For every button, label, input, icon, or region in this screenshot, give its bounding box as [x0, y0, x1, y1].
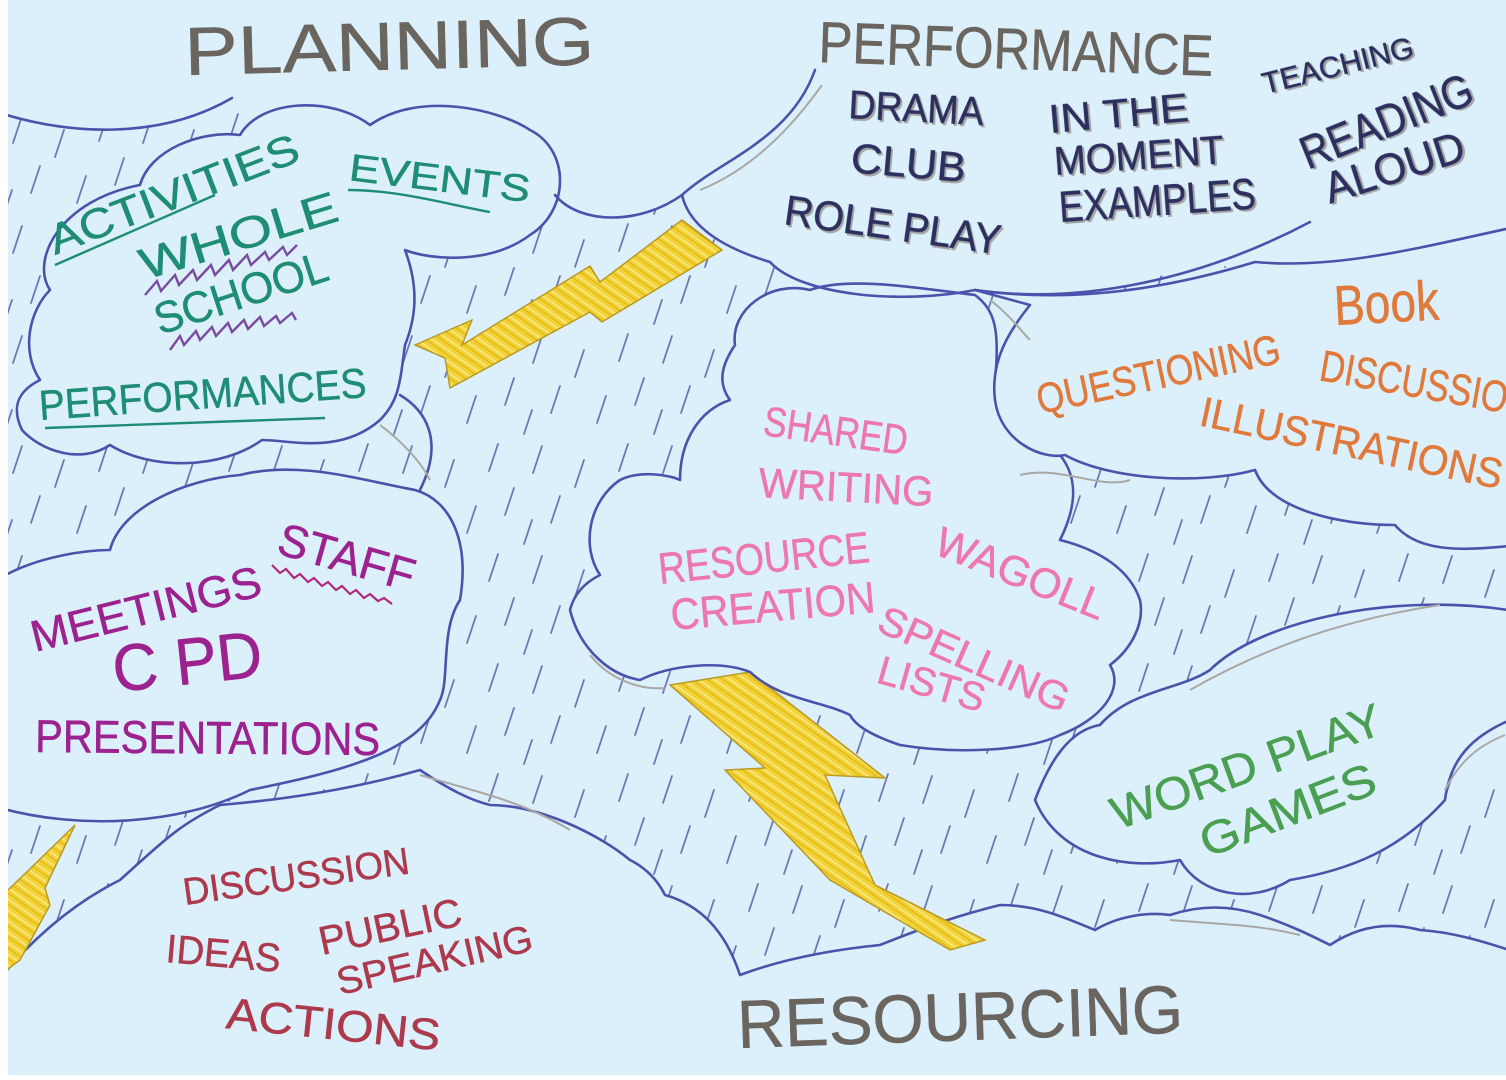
text: aloud: ALOUD: [1318, 122, 1471, 214]
heading: planning: PLANNING: [183, 3, 595, 90]
text: public: PUBLIC: [315, 891, 466, 964]
text: word play: WORD PLAY: [1104, 693, 1389, 839]
text: teaching: TEACHING: [1259, 31, 1417, 101]
text: examples: EXAMPLES: [1057, 169, 1257, 232]
lightning bolt: resourcing: [670, 672, 985, 950]
text: whole: WHOLE: [134, 183, 344, 290]
lightning bolt: planning to performance: [415, 220, 722, 388]
text: activities: ACTIVITIES: [41, 125, 306, 263]
underlines: [45, 190, 490, 428]
text: meetings: MEETINGS: [26, 557, 266, 662]
panel: word play cloud: [1035, 605, 1506, 894]
text: staff: STAFF: [272, 513, 421, 601]
panel: performance cloud outline: [400, 70, 1310, 490]
text: writing: WRITING: [758, 459, 935, 515]
heading: resourcing: RESOURCING: [736, 971, 1184, 1063]
text: ideas: IDEAS: [164, 927, 283, 981]
text: role play: ROLE PLAY: [782, 186, 1004, 263]
text: presentations: PRESENTATIONS: [35, 710, 380, 765]
text: reading: READING: [1292, 63, 1480, 179]
text: discussion: DISCUSSION: [180, 841, 412, 914]
text: in the: IN THE: [1047, 86, 1190, 142]
staff scribble underline: [272, 565, 392, 604]
panel: questioning cloud: [975, 226, 1506, 549]
text: school: SCHOOL: [148, 242, 334, 345]
panel: shared writing cloud: [570, 284, 1141, 750]
lightning bolt: left edge: [0, 825, 75, 975]
panel: staff meetings cloud: [0, 470, 463, 821]
text: shared: SHARED: [761, 397, 911, 464]
text: speaking: SPEAKING: [333, 918, 537, 1004]
text: drama: DRAMA: [848, 83, 985, 134]
text: creation: CREATION: [669, 573, 877, 640]
text: events: EVENTS: [347, 147, 533, 211]
text: questioning: QUESTIONING: [1032, 325, 1284, 423]
text: wagoll: WAGOLL: [929, 518, 1113, 629]
text: club: CLUB: [849, 134, 968, 191]
heading: performance: PERFORMANCE: [818, 10, 1215, 89]
panel: resourcing cloud bank: [0, 770, 1506, 1080]
text: games: GAMES: [1192, 752, 1383, 867]
panel: planning cloud: [0, 98, 560, 463]
panel: sky band above the clouds: [0, 0, 1506, 300]
text: spelling: SPELLING: [871, 598, 1077, 722]
pencil shading around clouds: [380, 85, 1505, 935]
text: CPD: C PD: [109, 617, 266, 706]
text: performances: PERFORMANCES: [37, 359, 368, 429]
text: lists: LISTS: [873, 648, 990, 721]
text: actions: ACTIONS: [224, 989, 443, 1060]
text: moment: MOMENT: [1053, 128, 1225, 184]
text: book: Book: [1332, 269, 1441, 337]
text: resource: RESOURCE: [656, 523, 872, 594]
